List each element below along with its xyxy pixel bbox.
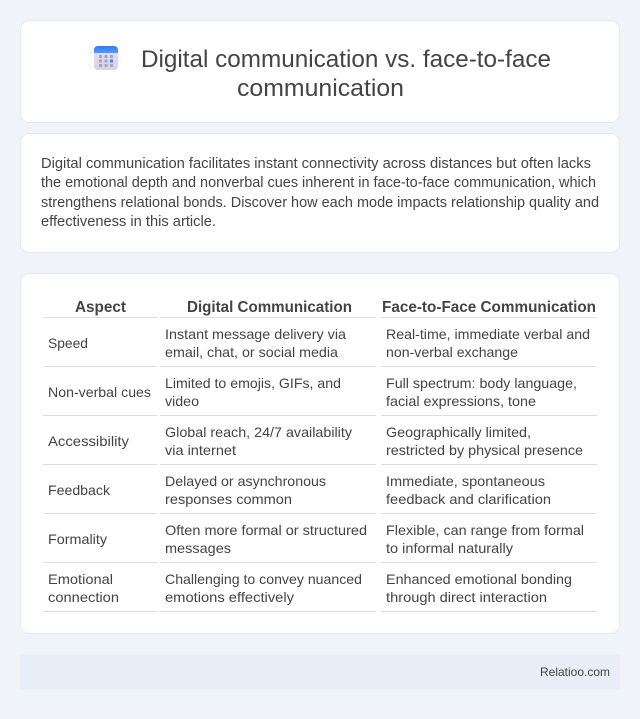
table row: emotional connection: Challenging to convey nuanced [165, 571, 362, 587]
table row: emotional connection: Enhanced emotional bonding [386, 571, 572, 587]
table row: formality: to informal naturally [386, 540, 513, 556]
table row: non-verbal cues: Full spectrum: body language, [386, 375, 577, 391]
table row: accessibility: via internet [165, 442, 236, 458]
table row: formality [43, 522, 597, 562]
table row: feedback [43, 473, 597, 514]
table row: formality: Formality [48, 531, 107, 547]
table row: formality: Flexible, can range from formal [386, 522, 584, 538]
panel: introduction [20, 134, 620, 252]
table row: emotional connection: connection [48, 589, 119, 605]
table row: non-verbal cues: facial expressions, tone [386, 393, 536, 409]
footer: Relatioo.com [540, 665, 610, 679]
table row: speed: non-verbal exchange [386, 344, 518, 360]
table row: feedback: Feedback [48, 482, 111, 498]
table row: non-verbal cues [43, 375, 597, 416]
table row: non-verbal cues: video [165, 393, 199, 409]
table row: speed [43, 326, 597, 366]
table row: feedback: Immediate, spontaneous [386, 473, 545, 489]
table row: non-verbal cues: Non-verbal cues [48, 384, 151, 400]
title: Digital communication vs. face-to-face [141, 46, 551, 73]
text block: introduction paragraph: strengthens relational bonds. Discover how each mode impacts relationship quality and [41, 195, 599, 211]
table row: speed: Instant message delivery via [165, 326, 346, 342]
table row: non-verbal cues: Limited to emojis, GIFs, and [165, 375, 341, 391]
table header row [43, 299, 597, 318]
footer [20, 655, 620, 689]
table row: accessibility [43, 424, 597, 464]
table row: emotional connection: Emotional [48, 571, 113, 587]
table row: accessibility: restricted by physical presence [386, 442, 583, 458]
title: communication [237, 75, 404, 102]
table row: emotional connection: emotions effectively [165, 589, 294, 605]
table row: accessibility: Global reach, 24/7 availability [165, 424, 352, 440]
text block: introduction paragraph [41, 156, 599, 230]
table row: feedback: responses common [165, 491, 292, 507]
table row: formality: Often more formal or structured [165, 522, 367, 538]
panel: comparison table [20, 274, 620, 634]
text block: introduction paragraph: the emotional depth and nonverbal cues inherent in face-to-face communication, which [41, 175, 596, 191]
text block: introduction paragraph: effectiveness in this article. [41, 214, 216, 230]
text block: introduction paragraph: Digital communication facilitates instant connectivity across distances but often lacks [41, 156, 591, 172]
table row: feedback: Delayed or asynchronous [165, 473, 326, 489]
table row: feedback: feedback and clarification [386, 491, 551, 507]
table row: accessibility: Accessibility [48, 433, 129, 449]
table row: emotional connection: through direct interaction [386, 589, 547, 605]
table row: speed: Real-time, immediate verbal and [386, 326, 590, 342]
icon: calendar app [94, 46, 118, 70]
table row: accessibility: Geographically limited, [386, 424, 531, 440]
table header row: Digital Communication [187, 299, 352, 316]
table header row: Aspect [75, 299, 126, 316]
table row: speed: Speed [48, 335, 88, 351]
table row: formality: messages [165, 540, 231, 556]
table row: emotional connection [43, 571, 597, 612]
panel: title card [20, 20, 620, 122]
table header row: Face-to-Face Communication [382, 299, 596, 316]
title [141, 46, 551, 102]
table row: speed: email, chat, or social media [165, 344, 338, 360]
